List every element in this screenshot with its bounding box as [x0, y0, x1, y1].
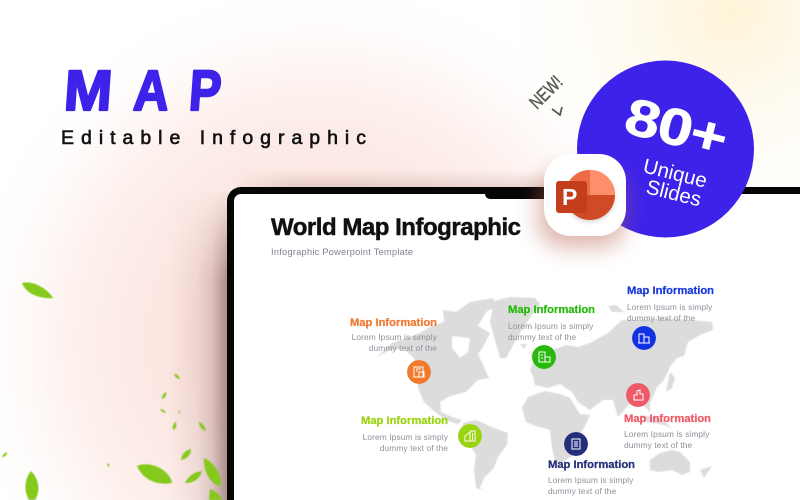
callout: blue: dummy text of the: [627, 313, 695, 323]
title: MAP: A: [132, 60, 171, 123]
callout: orange: dummy text of the: [369, 343, 437, 353]
callout: orange: [350, 317, 437, 353]
callout: navy: [548, 459, 635, 496]
callout: navy: Map Information: [548, 459, 635, 471]
notch: [485, 194, 555, 199]
top screen shadow: [252, 174, 544, 187]
callout: blue: [627, 285, 714, 323]
icon: red pin: [626, 383, 650, 407]
badge: 80+ unique slides: Slides: [644, 176, 704, 211]
device screen: [227, 187, 800, 500]
callout: orange: Lorem Ipsum is simply: [352, 332, 437, 342]
callout: orange: Map Information: [350, 317, 437, 329]
callout: green: Map Information: [508, 304, 595, 316]
icon: green pin: [532, 345, 556, 369]
title: MAP: M: [62, 59, 115, 123]
icon: PowerPoint app: [525, 154, 638, 261]
callout: navy: Lorem Ipsum is simply: [548, 475, 633, 485]
callout: green: dummy text of the: [508, 332, 576, 342]
title: MAP: [62, 59, 223, 123]
icon: PowerPoint app: P: [562, 184, 577, 210]
callout: red: [624, 413, 711, 450]
label: NEW!: NEW!: [525, 71, 567, 113]
icon: blue pin: [632, 326, 656, 350]
callout: red: Map Information: [624, 413, 711, 425]
subtitle: Editable Infographic: [61, 127, 366, 149]
callout: green: Lorem Ipsum is simply: [508, 321, 593, 331]
callout: lime: [361, 415, 448, 453]
leaves: [2, 282, 222, 500]
badge: 80+ unique slides: [577, 60, 754, 238]
icon: orange pin: [407, 360, 431, 384]
callout: green: [508, 304, 595, 342]
callout: red: dummy text of the: [624, 440, 692, 450]
callout: navy: dummy text of the: [548, 486, 616, 496]
screen shadow: [185, 198, 227, 500]
callout: blue: Map Information: [627, 285, 714, 297]
callout: lime: Map Information: [361, 415, 448, 427]
callout: blue: Lorem Ipsum is simply: [627, 302, 712, 312]
icon: lime pin: [458, 424, 482, 448]
title: MAP: P: [187, 59, 223, 123]
sub heading: Infographic Powerpoint Template: [271, 247, 413, 257]
badge: 80+ unique slides: 80+: [619, 87, 732, 168]
badge: 80+ unique slides: Unique: [641, 155, 709, 193]
heading: World Map Infographic: World Map Infographic: [271, 214, 521, 241]
callout: red: Lorem Ipsum is simply: [624, 429, 709, 439]
callout: lime: Lorem Ipsum is simply: [363, 432, 448, 442]
icon: navy pin: [564, 432, 588, 456]
callout: lime: dummy text of the: [380, 443, 448, 453]
